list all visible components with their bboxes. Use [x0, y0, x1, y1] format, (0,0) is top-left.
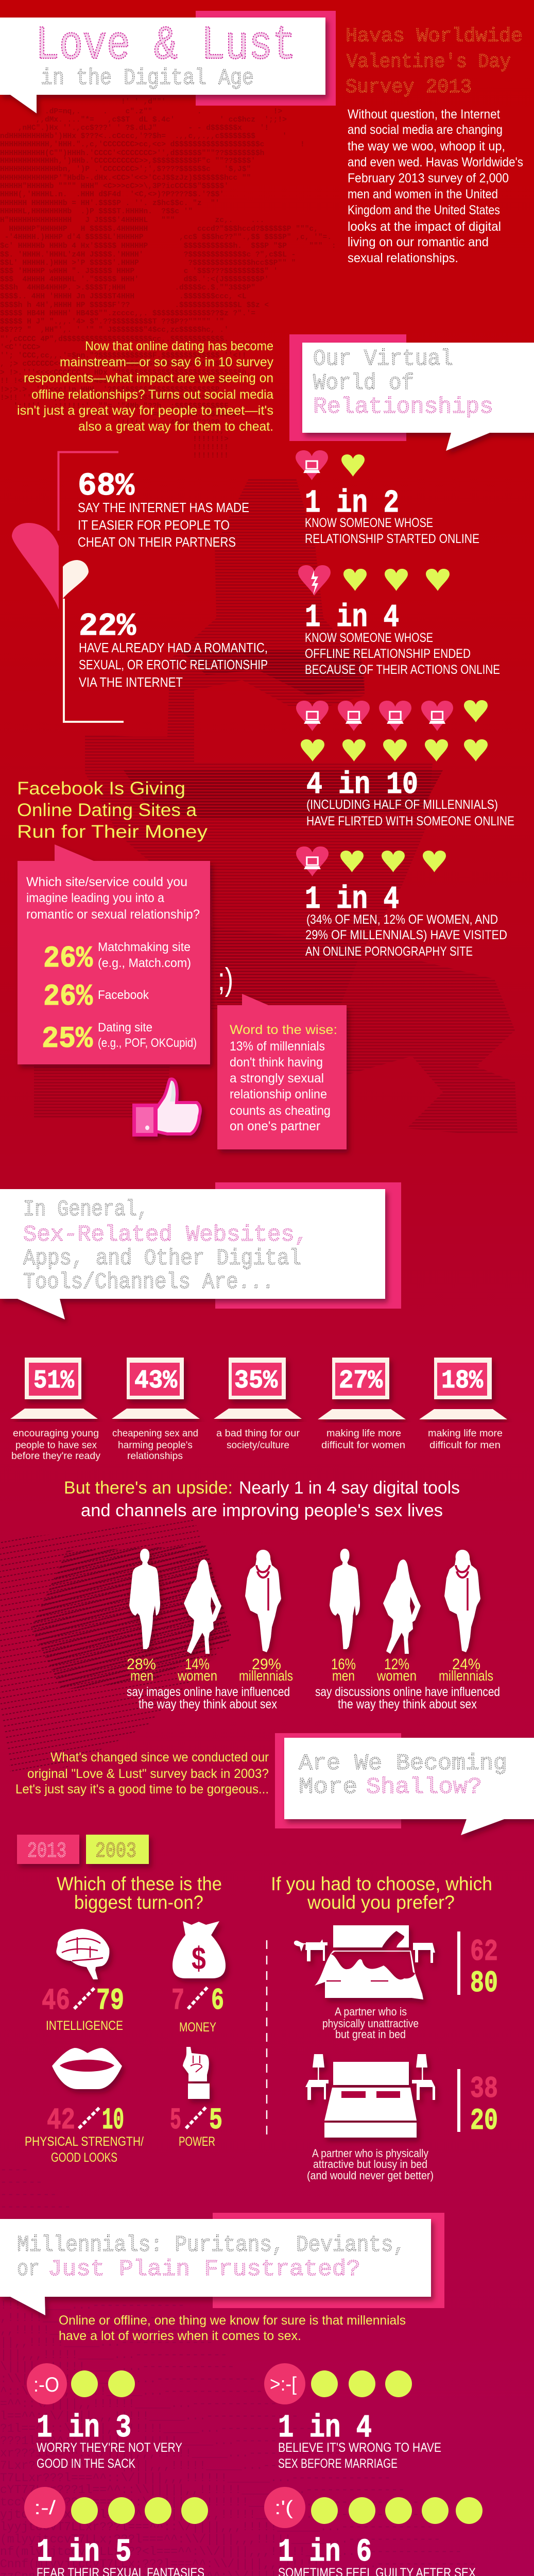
turn-on: power [170, 2047, 222, 2149]
turn-on: power: 5 [209, 2104, 222, 2138]
ascii art: top map: HHHHHH HHHHHHHb = HH'.$$$$P . ''. z$hc$$c. "z "' [0, 199, 219, 208]
legend: 2013 and 2003 [17, 1835, 149, 1864]
legend: 2013 and 2003: 2013 [27, 1839, 66, 1863]
legend: 2013 and 2003: 2003 [95, 1839, 136, 1863]
ascii art: top map: HHHHHL,HHHHHHHHb .)P $$$$T.HHHHn. ?$$c '" [0, 208, 193, 216]
title panel: Love and Lust [0, 11, 336, 113]
turn-on: money: $ [191, 1942, 206, 1979]
ascii art: top map: HHHH(,'HHHHL.n. .HHH d$F4d '<C,<>)?P????$$.'?$$' [0, 191, 224, 199]
intro paragraph: and social media are changing [348, 123, 503, 137]
intro paragraph: February 2013 survey of 2,000 [348, 171, 509, 185]
laptop: 51%: encouraging young [13, 1428, 99, 1439]
bed: messy: physically unattractive [322, 2017, 419, 2030]
panel: which site or service: Which site/service could you [26, 875, 187, 889]
ascii art: top map: !!!!!!!! [0, 444, 229, 452]
ascii art: lower background: tccYT7Lxr???l===^^::\/||||,,,!!!!!!______...--------------- [0, 2496, 419, 2509]
heading panel: Our Virtual World of Relationships [289, 334, 534, 451]
turn-on: good looks: PHYSICAL STRENGTH/ [25, 2134, 144, 2149]
ascii art: lower background: ---- [0, 2163, 28, 2177]
stats: images online [127, 1656, 293, 1711]
heading panel: Are We Becoming More Shallow [275, 1733, 534, 1835]
ascii art: top map: $$$$.. 4HH 'HHHH Jn J$$$$T4HHH .$$$$$$$ccc, <L [0, 293, 247, 301]
heading panel: Our Virtual World of Relationships: Relationships [313, 394, 493, 420]
stat: 1 in 4 wrong before marriage: BELIEVE IT'S WRONG TO HAVE [278, 2441, 441, 2455]
ascii art: top map: HHHHHHHHHHHHHbn, ')P .'CCCCCCC>';',$????$$$$$$c '$,J$" [0, 165, 251, 174]
heading: Facebook: Online Dating Sites a [17, 800, 197, 820]
panel: which site or service: Matchmaking site [98, 940, 191, 954]
ascii art: lower background: -------- [0, 2188, 57, 2201]
stats: discussions online: millennials [439, 1668, 493, 1684]
panel: which site or service: (e.g., POF, OKCupid) [98, 1036, 197, 1050]
panel: which site or service: 25% [42, 1023, 93, 1056]
intro paragraph: living on our romantic and [348, 235, 489, 249]
heading: biggest turn-on [57, 1873, 222, 1913]
stat: 68% [78, 468, 249, 550]
bed: messy: 80 [470, 1967, 498, 2001]
ascii art: top map: !!!!!!!! [0, 452, 229, 460]
dashed divider [266, 1940, 267, 2139]
turn-on: intelligence [42, 1929, 124, 2033]
yellow intro: online dating: respondents—what impact are we seeing on [24, 371, 273, 385]
turn-on: good looks: GOOD LOOKS [51, 2150, 117, 2165]
ascii art: top map: !!!!!!!!!'' ''"=n. .,"Hn.'$$$$$$$F [0, 411, 242, 419]
ascii art: top map: HHHHHHHHHH(C"")HHHh.'CCCC'<CCCCCCC>'',d$$$$$$"""??$$$$$$$$h [0, 149, 264, 158]
heading panel: Our Virtual World of Relationships: World of [313, 370, 414, 396]
yellow text: what has changed: original "Love & Lust" survey back in 2003? [27, 1767, 269, 1781]
bed: messy: 62 [470, 1936, 498, 1969]
heading panel: Millennials: Millennials: Puritans, Deviants, [17, 2232, 405, 2258]
stat: 1 in 5: 1 in 5 [37, 2534, 131, 2570]
ascii art: lower background: ------ [0, 2176, 43, 2189]
stat: 1 in 4 wrong before marriage [264, 2363, 441, 2471]
stat: 1 in 4 porn site: 29% OF MILLENNIALS) HAVE VISITED [305, 928, 507, 942]
turn-on: money [171, 1921, 226, 2035]
ascii art: top map: $$$h 4HHB4HHHP. >.$$$$T;HHH .d$$$$c.$.""3$$$P" [0, 284, 255, 292]
pink backing [196, 11, 336, 106]
heading panel: Millennials: or [17, 2257, 40, 2282]
stat: 1 in 2 with hearts: RELATIONSHIP STARTED ONLINE [305, 532, 479, 546]
ascii art: top map: > !>.'''<<<<CCCCCC.. HDx "?$$$$$$$$$$$$$$$$$$$$$$$$$$$h. [0, 369, 251, 377]
stat: 68%: CHEAT ON THEIR PARTNERS [78, 534, 236, 550]
turn-on: power: POWER [179, 2134, 215, 2149]
laptop: 35%: a bad thing for our [216, 1428, 300, 1439]
yellow intro: online dating [17, 339, 273, 434]
ascii art: top map: !! !<<<<<<<'''''_'' "4$$$$$$$$$$$$$$$$$$$$$$$$$$$$h [0, 377, 229, 385]
panel: which site or service: Dating site [98, 1021, 152, 1035]
ascii art: top map: "',cCCCC 4P",d$$$$$$$$$$$$$$$$$$$$cc,.$$$$$$$$$$$$. [0, 335, 229, 344]
ascii art: top map: !>!! '''' .;;;!!!!!'"4HHh.'"??$$$$$$$$$$$$$$$$F [0, 394, 215, 402]
heading: Facebook [17, 778, 208, 842]
ascii art: lower background: ???1l==^^::\/||||,,,!!!!!_____...------------- [0, 2434, 327, 2448]
ascii art: top map: !' ' ,d""' [0, 98, 166, 106]
ascii art: top map: .dP=nq,. . c".z"" . !> [0, 108, 282, 116]
laptop stats row [10, 1358, 507, 1462]
ascii art: top map: !!!!!!!> [0, 435, 229, 444]
ascii art: top map: $$$ 'HHHHP wHHH ". J$$$$$ HHHP c '$$$???$$$$$$$$$" ' [0, 267, 278, 276]
turn-on: money: 7 [171, 1985, 184, 2018]
stat: 4 in 10 with hearts: 4 in 10 [306, 768, 418, 803]
turn-on: money: MONEY [179, 2020, 216, 2035]
ascii art: lower background: yjtccvT7Lxr???l===^^::\/||||,,,!!!!!______...---------------- [0, 2508, 434, 2521]
stat: 4 in 10 with hearts: (INCLUDING HALF OF MILLENNIALS) [306, 798, 498, 812]
stat: 1 in 4 with broken heart: 1 in 4 [305, 599, 399, 636]
title text: Love & Lust [36, 19, 296, 73]
yellow text: what has changed: Let's just say it's a good time to be gorgeous... [15, 1782, 269, 1797]
laptop: 51%: before they're ready [11, 1451, 101, 1462]
heading panel: In General: In General, [23, 1197, 148, 1223]
heading panel: In General: Tools/Channels Are... [23, 1269, 274, 1295]
stat: 1 in 6 [264, 2487, 483, 2576]
upside text: and channels are improving people's sex lives [81, 1501, 443, 1520]
ascii art: top map: HHHHHHHHHHHHP'"Hbdb-.dHx.<CC>'<<>'CcJ$$zJz)$$$$$$$hcc "" [0, 174, 251, 182]
heading: which would you prefer: would you prefer? [307, 1892, 455, 1913]
ascii art: top map: H"HHHHHHHHHHHHHH J J$$$$'4HHHHL """ zc,. ... [0, 216, 264, 225]
stat: 1 in 4 wrong before marriage: >:-[ [270, 2374, 297, 2395]
stat: 68%: IT EASIER FOR PEOPLE TO [78, 517, 230, 533]
laptop: 43% [112, 1358, 200, 1462]
stats: discussions online: women [376, 1668, 417, 1684]
stat: 1 in 5: :-/ [34, 2497, 56, 2519]
survey title [346, 25, 523, 98]
laptop: 27%: 27% [339, 1366, 383, 1396]
ascii art: lower background: T7LLxr???l===^^::\/||||,,,!!!!!!______...-------------- [0, 2471, 391, 2485]
panel: word to the wise: counts as cheating [230, 1104, 331, 1118]
turn-on: intelligence: 46 [42, 1985, 70, 2018]
ascii art: lower background: \||||,,!!!!!_____...------------- [0, 2360, 234, 2374]
stat: 1 in 4 porn site: (34% OF MEN, 12% OF WOMEN, AND [306, 912, 498, 927]
turn-on: money: 6 [211, 1985, 224, 2018]
ascii art: top map: ,nHC".)Hx ''.,cc$???' ' ?$.dLJ" - - d$$$$$$x '! [0, 124, 269, 132]
ascii art: lower background: ^::\/|||,,!!!!!_____...-------------- [0, 2385, 263, 2398]
ascii art: lower background: xr???1l==^^::\/||||,,,!!!!!_____...------------- [0, 2447, 341, 2460]
speech bubble [0, 18, 325, 113]
stat: 1 in 4 with broken heart: OFFLINE RELATIONSHIP ENDED [305, 647, 471, 661]
panel: which site or service: Facebook [98, 988, 149, 1002]
yellow text: millennial worries: Online or offline, one thing we know for sure is that millennials [59, 2313, 406, 2328]
ascii art: top map: HHHHHP"HHHHHP H $$$$$.4HHHHHH cccd?"$$$hccd?$$$$$$P """c, [0, 225, 318, 233]
ascii art: lower background [0, 2163, 534, 2576]
ascii art: top map: $c' HHHHHb HHHb 4 Hx'$$$$$ HHHHHP $$$$$$$$$$$h. $$$P "$P """ : [0, 242, 336, 250]
turn-on: intelligence: INTELLIGENCE [46, 2019, 123, 2033]
panel: which site or service: imagine leading you into a [26, 891, 164, 905]
laptop: 18%: making life more [428, 1428, 503, 1439]
panel: which site or service: 26% [43, 942, 93, 976]
bed: neat: (and would never get better) [307, 2169, 434, 2182]
panel: word to the wise: Word to the wise: [230, 1023, 337, 1037]
laptop: 43%: 43% [134, 1366, 178, 1396]
stat: 1 in 3 [27, 2363, 182, 2471]
panel: word to the wise: 13% of millennials [230, 1039, 325, 1054]
turn-on: good looks [25, 2048, 144, 2165]
survey title: Valentine's Day [347, 51, 511, 73]
stats: images online: 14% [185, 1656, 210, 1673]
heading panel: Millennials: Just Plain Frustrated? [48, 2257, 360, 2282]
ascii art: lower background: (mlyyjtccvT7LLx;???l===^^:\\/||||,,,!!!!!_____...------------- [0, 2533, 441, 2546]
stat: 22%: VIA THE INTERNET [79, 674, 183, 690]
panel: which site or service: (e.g., Match.com) [98, 956, 191, 970]
bed: neat: A partner who is physically [312, 2147, 428, 2160]
stat: 1 in 6: 1 in 6 [278, 2534, 372, 2570]
stats: images online: 29% [252, 1656, 281, 1673]
panel: which site or service: 26% [43, 980, 93, 1014]
stat: 1 in 4 with broken heart: KNOW SOMEONE WHOSE [305, 631, 433, 645]
figures: images online [129, 1549, 281, 1654]
laptop: 35% [214, 1358, 302, 1451]
survey title: Havas Worldwide [346, 25, 523, 47]
stat: 1 in 4 porn site: 1 in 4 [305, 881, 399, 918]
stat: 1 in 2 with hearts: 1 in 2 [305, 485, 399, 521]
stat: 1 in 4 porn site [296, 846, 507, 959]
figures: discussions online [330, 1549, 480, 1654]
stat: 1 in 4 porn site: AN ONLINE PORNOGRAPHY SITE [305, 944, 473, 959]
ascii art: lower background: cYT77Lxr???1l==^^::\\|||||,,!!!!!!______...-------------- [0, 2483, 405, 2497]
stat: 1 in 6: :'( [274, 2497, 293, 2519]
panel: word to the wise: a strongly sexual [230, 1071, 324, 1086]
laptop: 18%: difficult for men [429, 1440, 501, 1451]
stat: 1 in 3: GOOD IN THE SACK [37, 2456, 135, 2471]
panel: word to the wise: on one's partner [230, 1119, 320, 1133]
heading: biggest turn-on: Which of these is the [57, 1873, 222, 1894]
stats: images online: say images online have influenced [127, 1685, 290, 1699]
heading: biggest turn-on: biggest turn-on? [74, 1892, 203, 1913]
yellow text: millennial worries [59, 2313, 406, 2343]
intro paragraph: sexual relationships. [348, 251, 458, 265]
ascii art: top map: $$$$$ HB4H HHHH' HB4$$"".zcccc,,. $$$$$$$$$$$$$??$z ?".'= [0, 310, 255, 318]
bed: messy: but great in bed [335, 2028, 406, 2041]
turn-on: intelligence: 79 [96, 1985, 124, 2018]
bed: messy: A partner who is [335, 2005, 407, 2018]
turn-on: good looks: 10 [102, 2104, 124, 2138]
ascii art: top map: $$$$h h 4H',HHHH HP $$$$$F'?? .$$$$$$$$$$$$$L $$z < [0, 301, 269, 310]
laptop: 43%: cheapening sex and [112, 1428, 198, 1439]
stats: images online: millennials [239, 1668, 293, 1684]
ascii art: lower background: !!!!!_____...------------- [0, 2299, 185, 2312]
panel: which site or service [18, 844, 210, 1064]
bed: neat: 38 [470, 2073, 498, 2106]
ascii art: top map: ':!!'' ,;!!!!!;' ""=.'"4Mb."??h ;$$$$$$$$$$$F [0, 402, 229, 411]
ascii art: top map: !!!!!!; [0, 427, 224, 435]
panel: which site or service: romantic or sexual relationship? [26, 907, 200, 922]
stat: 22%: 22% [79, 608, 136, 645]
stats: discussions online: say discussions online have influenced [315, 1685, 500, 1699]
ascii art: lower background: ?1l==^^::\/||||,,,!!!!!_____...------------- [0, 2422, 313, 2435]
laptop: 27%: making life more [326, 1428, 401, 1439]
ascii art: top map: !!!!!' ".. 4HHHnr"???P [0, 419, 220, 427]
stat: 1 in 2 with hearts [296, 450, 479, 546]
ascii art: lower background: l==^^::\/||||,,,!!!!!_____...------------- [0, 2410, 299, 2423]
ascii art: top map: HHHHH"HHHHHb """" HHH" <C>>>cC>>\,3P?icCCC$$"$$$$$' [0, 182, 229, 191]
yellow intro: online dating: isn't just a great way for people to meet—it's [17, 403, 273, 418]
panel: word to the wise: relationship online [230, 1087, 327, 1101]
turn-on: power: 5 [170, 2104, 181, 2138]
upside text: Nearly 1 in 4 say digital tools [239, 1478, 460, 1498]
heading panel: In General: Sex-Related Websites, [23, 1222, 308, 1248]
stat: 1 in 3: WORRY THEY'RE NOT VERY [37, 2441, 182, 2455]
bed: neat: attractive but lousy in bed [313, 2158, 427, 2171]
ascii art: lower background: Cnnf(mlyyjtccvT7LLx;???l===^^:\\/||||,,,!!!!!_____...-------------- [0, 2557, 476, 2571]
heading panel: Are We Becoming More Shallow: Are We Becoming [299, 1751, 507, 1776]
ascii art: top map: $$$$$ H J" ".,,.'4> $".??$$$$$$$$$T ??$P??""""" '" [0, 318, 224, 326]
ascii art: top map: $$$ 4HHHH 4HHHHL '."$$$$$ HHH' d$$.':<(J$$$$$$$$P' [0, 276, 269, 284]
ascii art: lower background: ,,!!!!!_____...------------- [0, 2324, 199, 2337]
ascii art: top map: $$L' HHHHH.)HHH >'P $$$$$'.HHHP ?$$$$$$$$$$$$$hcc$$P"" " [0, 259, 296, 267]
survey title: Survey 2013 [346, 76, 472, 98]
ascii art: top map: $$??? " ,HH"',. ' '" " J$$$$$$$"4$cc,zc$$$$$hc, .' [0, 326, 229, 334]
yellow intro: online dating: offline relationships? Turns out social media [31, 387, 273, 402]
icon: thumbs up [132, 1079, 200, 1137]
stat: 1 in 2 with hearts: KNOW SOMEONE WHOSE [305, 516, 433, 530]
laptop: 51%: 51% [33, 1366, 75, 1396]
ascii art: top map: , ;> cCCCCCC<<<<..'?$$$$$$$$$$$$$$$$$$$$$$$$$$$$$$$c [0, 360, 233, 368]
stat: 1 in 4 with broken heart [298, 565, 500, 677]
laptop: 18%: 18% [441, 1366, 484, 1396]
intro paragraph: Without question, the Internet [348, 107, 500, 122]
ascii art: lower background: nf(mlyyjtccvT7LLx;??<l===^^:\\/||||,,,!!!!!_____...-------------- [0, 2545, 462, 2558]
yellow text: what has changed: What's changed since we conducted our [50, 1750, 269, 1765]
ascii art: lower background: ---------- [0, 2200, 71, 2214]
stats: discussions online: 24% [452, 1656, 480, 1673]
ascii art: lower background: |||,,,!!!!!_____...------------- [0, 2348, 228, 2362]
stat: 68%: 68% [78, 468, 135, 504]
laptop: 51%: people to have sex [15, 1440, 97, 1451]
bed: neat [305, 2054, 498, 2182]
heading: Facebook: Run for Their Money [17, 822, 208, 842]
ascii art: top map: ''; 'CCC,cc,,.'=$nn."?$$$$$$$$$$$$F.$$$$$$$$$$$$$ ''<!! [0, 352, 247, 360]
stats: discussions online [315, 1656, 500, 1711]
ascii art: top map [0, 98, 336, 460]
stats: discussions online: 12% [384, 1656, 409, 1673]
diagonal number pattern [0, 1517, 232, 1772]
heading: which would you prefer: If you had to choose, which [271, 1873, 492, 1894]
subtitle text: in the Digital Age [41, 65, 254, 91]
ascii art: hatched silhouettes behind statistics [34, 479, 518, 1133]
turn-on: good looks: 42 [47, 2104, 75, 2138]
stat: 22%: HAVE ALREADY HAD A ROMANTIC, [79, 640, 268, 655]
winking emoticon: ;) [218, 962, 233, 997]
upside text [64, 1478, 460, 1520]
ascii art: top map: !>;>.> '''<<c!!n HHH. '?$$$$$$$$$$$$$$$$$$$$$$$P [0, 386, 220, 394]
intro paragraph: men and women in the United [348, 187, 498, 201]
yellow intro: online dating: Now that online dating has become [85, 339, 273, 353]
frame and split heart [12, 452, 124, 722]
heading panel: Our Virtual World of Relationships: Our Virtual [313, 346, 453, 372]
laptop: 35%: society/culture [227, 1440, 289, 1451]
ascii art: top map: ndHHHHHHHHHb')HHx $???<..cCccc,'??$h= .,,c,,.,,c$$$$$$$$ ' [0, 132, 287, 141]
yellow text: what has changed [15, 1750, 269, 1797]
stats: images online: the way they think about sex [139, 1697, 277, 1711]
stats: discussions online: the way they think about sex [338, 1697, 477, 1711]
heading panel: Are We Becoming More Shallow: More [299, 1774, 357, 1800]
yellow text: millennial worries: have a lot of worries when it comes to sex. [59, 2329, 301, 2343]
laptop: 43%: harming people's [118, 1440, 193, 1451]
yellow intro: online dating: mainstream—or so say 6 in 10 survey [60, 355, 273, 369]
heading panel: In General [0, 1182, 401, 1319]
ascii art: top map: -'4HHHH.)HHHP d'4 $$$$$L'HHHHHP ,cc$ $$$hc??"".,$$ $$$$P" ,c, '"=. [0, 233, 332, 242]
laptop: 27% [318, 1358, 406, 1451]
stat: 22%: SEXUAL, OR EROTIC RELATIONSHIP [79, 657, 268, 672]
bed: neat: 20 [470, 2105, 498, 2138]
heading panel: Are We Becoming More Shallow: Shallow? [366, 1774, 482, 1800]
ascii art: lower background: =^^::\/||||,,!!!!!!_____...------------- [0, 2397, 284, 2411]
panel: word to the wise: don't think having [230, 1055, 323, 1070]
heading: which would you prefer [271, 1873, 492, 1913]
stats: discussions online: men [332, 1668, 355, 1684]
ascii art: lower background: ,!!!!!_____...------------- [0, 2311, 192, 2325]
laptop: 18% [419, 1358, 507, 1451]
stat: 1 in 3: 1 in 3 [37, 2410, 131, 2446]
stat: 1 in 5 [24, 2487, 208, 2576]
stat: 1 in 3: :-O [33, 2374, 59, 2396]
ascii art: top map: $$. 'HHHH.'HHHL'z4H J$$$$.'HHHH' ?$$$$$$$$$$$$$c ?",c$$L - [0, 251, 296, 259]
heading panel: Millennials [0, 2213, 444, 2315]
stat: 1 in 4 wrong before marriage: 1 in 4 [278, 2410, 372, 2446]
laptop: 43%: relationships [127, 1451, 183, 1462]
laptop: 35%: 35% [234, 1366, 278, 1396]
stats: images online: 28% [127, 1656, 156, 1673]
stats: discussions online: 16% [331, 1656, 356, 1673]
laptop: 27%: difficult for women [321, 1440, 405, 1451]
heading panel: In General: Apps, and Other Digital [23, 1246, 301, 1272]
ascii art: lower background: lyyjtccvT7LLxr???l===^^::\/||||,,,!!!!!______...------------- [0, 2520, 434, 2534]
panel: word to the wise [217, 994, 347, 1149]
intro paragraph [348, 107, 523, 265]
stat: 22% [79, 608, 268, 690]
stats: images online: women [177, 1668, 217, 1684]
intro paragraph: the way we woo, whoop it up, [348, 139, 505, 154]
stats: images online: men [130, 1668, 153, 1684]
ascii art: top map: HHHHHHHHHHH,'HHH.".,c,'CCCCCCC>cc,<c> d$$$$$$$$$$$$$$$$$$$c ! [0, 141, 305, 149]
intro paragraph: looks at the impact of digital [348, 219, 501, 234]
upside text: But there's an upside: [64, 1478, 233, 1498]
ascii art: top map: HHHHHHHHHHHHh,')HHb.'CCCCCCCCCC>>,$$$$$$$$$$F"c ""??$$$$' [0, 157, 255, 165]
ascii art: lower background: ||,,!!!!!_____...------------- [0, 2336, 213, 2349]
intro paragraph: Kingdom and the United States [348, 203, 500, 217]
ascii art: top map: '<C''CCC> == [0, 344, 94, 352]
heading: Facebook: Facebook Is Giving [17, 778, 185, 799]
ascii art: lower background: 7Lxr???1l==^^::\/||||,,,!!!!!_____...------------- [0, 2459, 355, 2472]
laptop: 51% [10, 1358, 101, 1462]
stat: 4 in 10 with hearts [296, 700, 514, 828]
yellow intro: online dating: also a great way for them to cheat. [78, 419, 273, 434]
ascii art: lower background: :\\||||,,!!!!!_____...-------------- [0, 2372, 256, 2386]
stat: 68%: SAY THE INTERNET HAS MADE [78, 500, 249, 515]
bed: messy [294, 1925, 498, 2041]
stat: 1 in 4 wrong before marriage: SEX BEFORE MARRIAGE [278, 2456, 398, 2471]
ascii art: top map: ,,dMx. ..."*= ,c$$T dL $.4c' ' cc$hcz ';;!> [0, 116, 287, 124]
